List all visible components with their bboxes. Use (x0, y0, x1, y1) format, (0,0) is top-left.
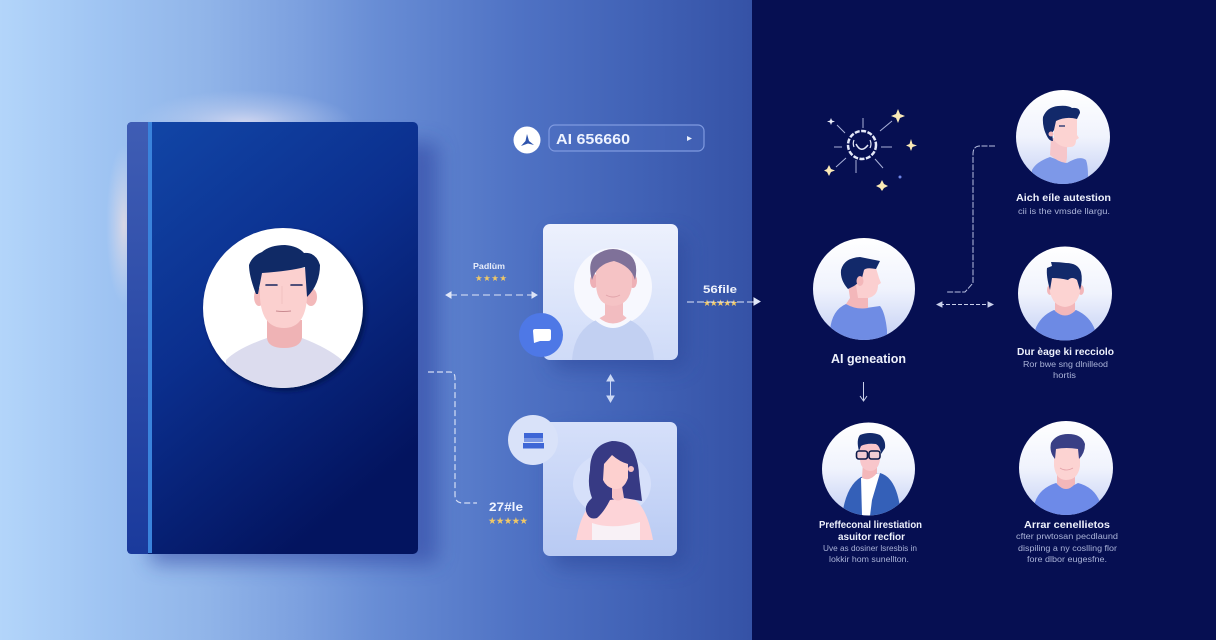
book spine (127, 122, 148, 554)
label: right middle avatar (1017, 347, 1114, 380)
label: right rating (703, 284, 738, 308)
label: bottom right avatar: dispiling a ny coslling flor (1018, 544, 1117, 553)
avatar: glasses (822, 422, 915, 516)
label: glasses avatar (819, 520, 922, 564)
label: top avatar: cii is the vmsde llargu. (1018, 207, 1110, 216)
label: top avatar (1016, 193, 1111, 216)
card: upper portrait (543, 224, 678, 360)
arrow: left double (446, 292, 537, 298)
heading: AI generation: AI geneation (831, 351, 906, 366)
arrow: to dark panel (687, 298, 760, 305)
badge: logo (514, 126, 540, 154)
label: bottom right avatar: fore dlbor eugesfne. (1027, 555, 1107, 564)
arrow: horizontal double (937, 302, 993, 307)
label: lower rating: 27#le (489, 502, 523, 514)
label: right middle avatar: hortis (1053, 371, 1076, 380)
label: glasses avatar: lokkir hom sunellton. (829, 555, 909, 564)
search field (549, 125, 704, 151)
glow behind book (106, 90, 355, 305)
label: lower rating (488, 502, 528, 527)
avatar: bottom right (1019, 421, 1113, 516)
label: left rating: ★★★★ (475, 273, 507, 283)
connector: elbow (947, 146, 995, 292)
left gradient background (0, 0, 752, 640)
right dark background (752, 0, 1216, 640)
card shadow (552, 433, 686, 567)
icon: chat bubble (519, 313, 563, 357)
avatar: top (1016, 90, 1110, 190)
label: bottom right avatar: cfter prwtosan pecdlaund (1016, 532, 1118, 541)
portrait on book (203, 228, 366, 391)
panel: book (127, 122, 418, 554)
label: top avatar: Aich eíle autestion (1016, 193, 1111, 204)
card shadow (552, 235, 686, 369)
label: right middle avatar: Dur èage ki recciolo (1017, 347, 1114, 358)
label: right rating: 56file (703, 284, 737, 296)
icon: AI chip with sparkles (824, 109, 917, 191)
label: left rating (473, 262, 507, 283)
label: bottom right avatar (1016, 520, 1118, 564)
label: right rating: ★★★★★ (703, 298, 738, 308)
arrow: down (860, 382, 867, 401)
label: glasses avatar: Uve as dosiner lsresbis in (823, 544, 917, 553)
avatar: right middle (1018, 246, 1112, 342)
label: lower rating: ★★★★★ (488, 516, 528, 527)
glasses (856, 451, 880, 459)
spine highlight (148, 122, 152, 553)
search field: AI 656660 (556, 131, 630, 148)
book shadow (150, 142, 438, 564)
label: left rating: Padlùm (473, 262, 505, 271)
avatar: centre profile (813, 238, 915, 345)
label: right middle avatar: Ror bwe sng dlnilleod (1023, 360, 1108, 369)
connector: book to lower card (428, 372, 477, 503)
arrow: vertical double (607, 375, 614, 402)
card: lower portrait (543, 422, 677, 556)
label: glasses avatar: Preffeconal lirestiation (819, 520, 922, 531)
label: bottom right avatar: Arrar cenellietos (1024, 520, 1110, 531)
label: glasses avatar: asuitor recfior (838, 532, 905, 543)
icon: layers (508, 415, 558, 465)
